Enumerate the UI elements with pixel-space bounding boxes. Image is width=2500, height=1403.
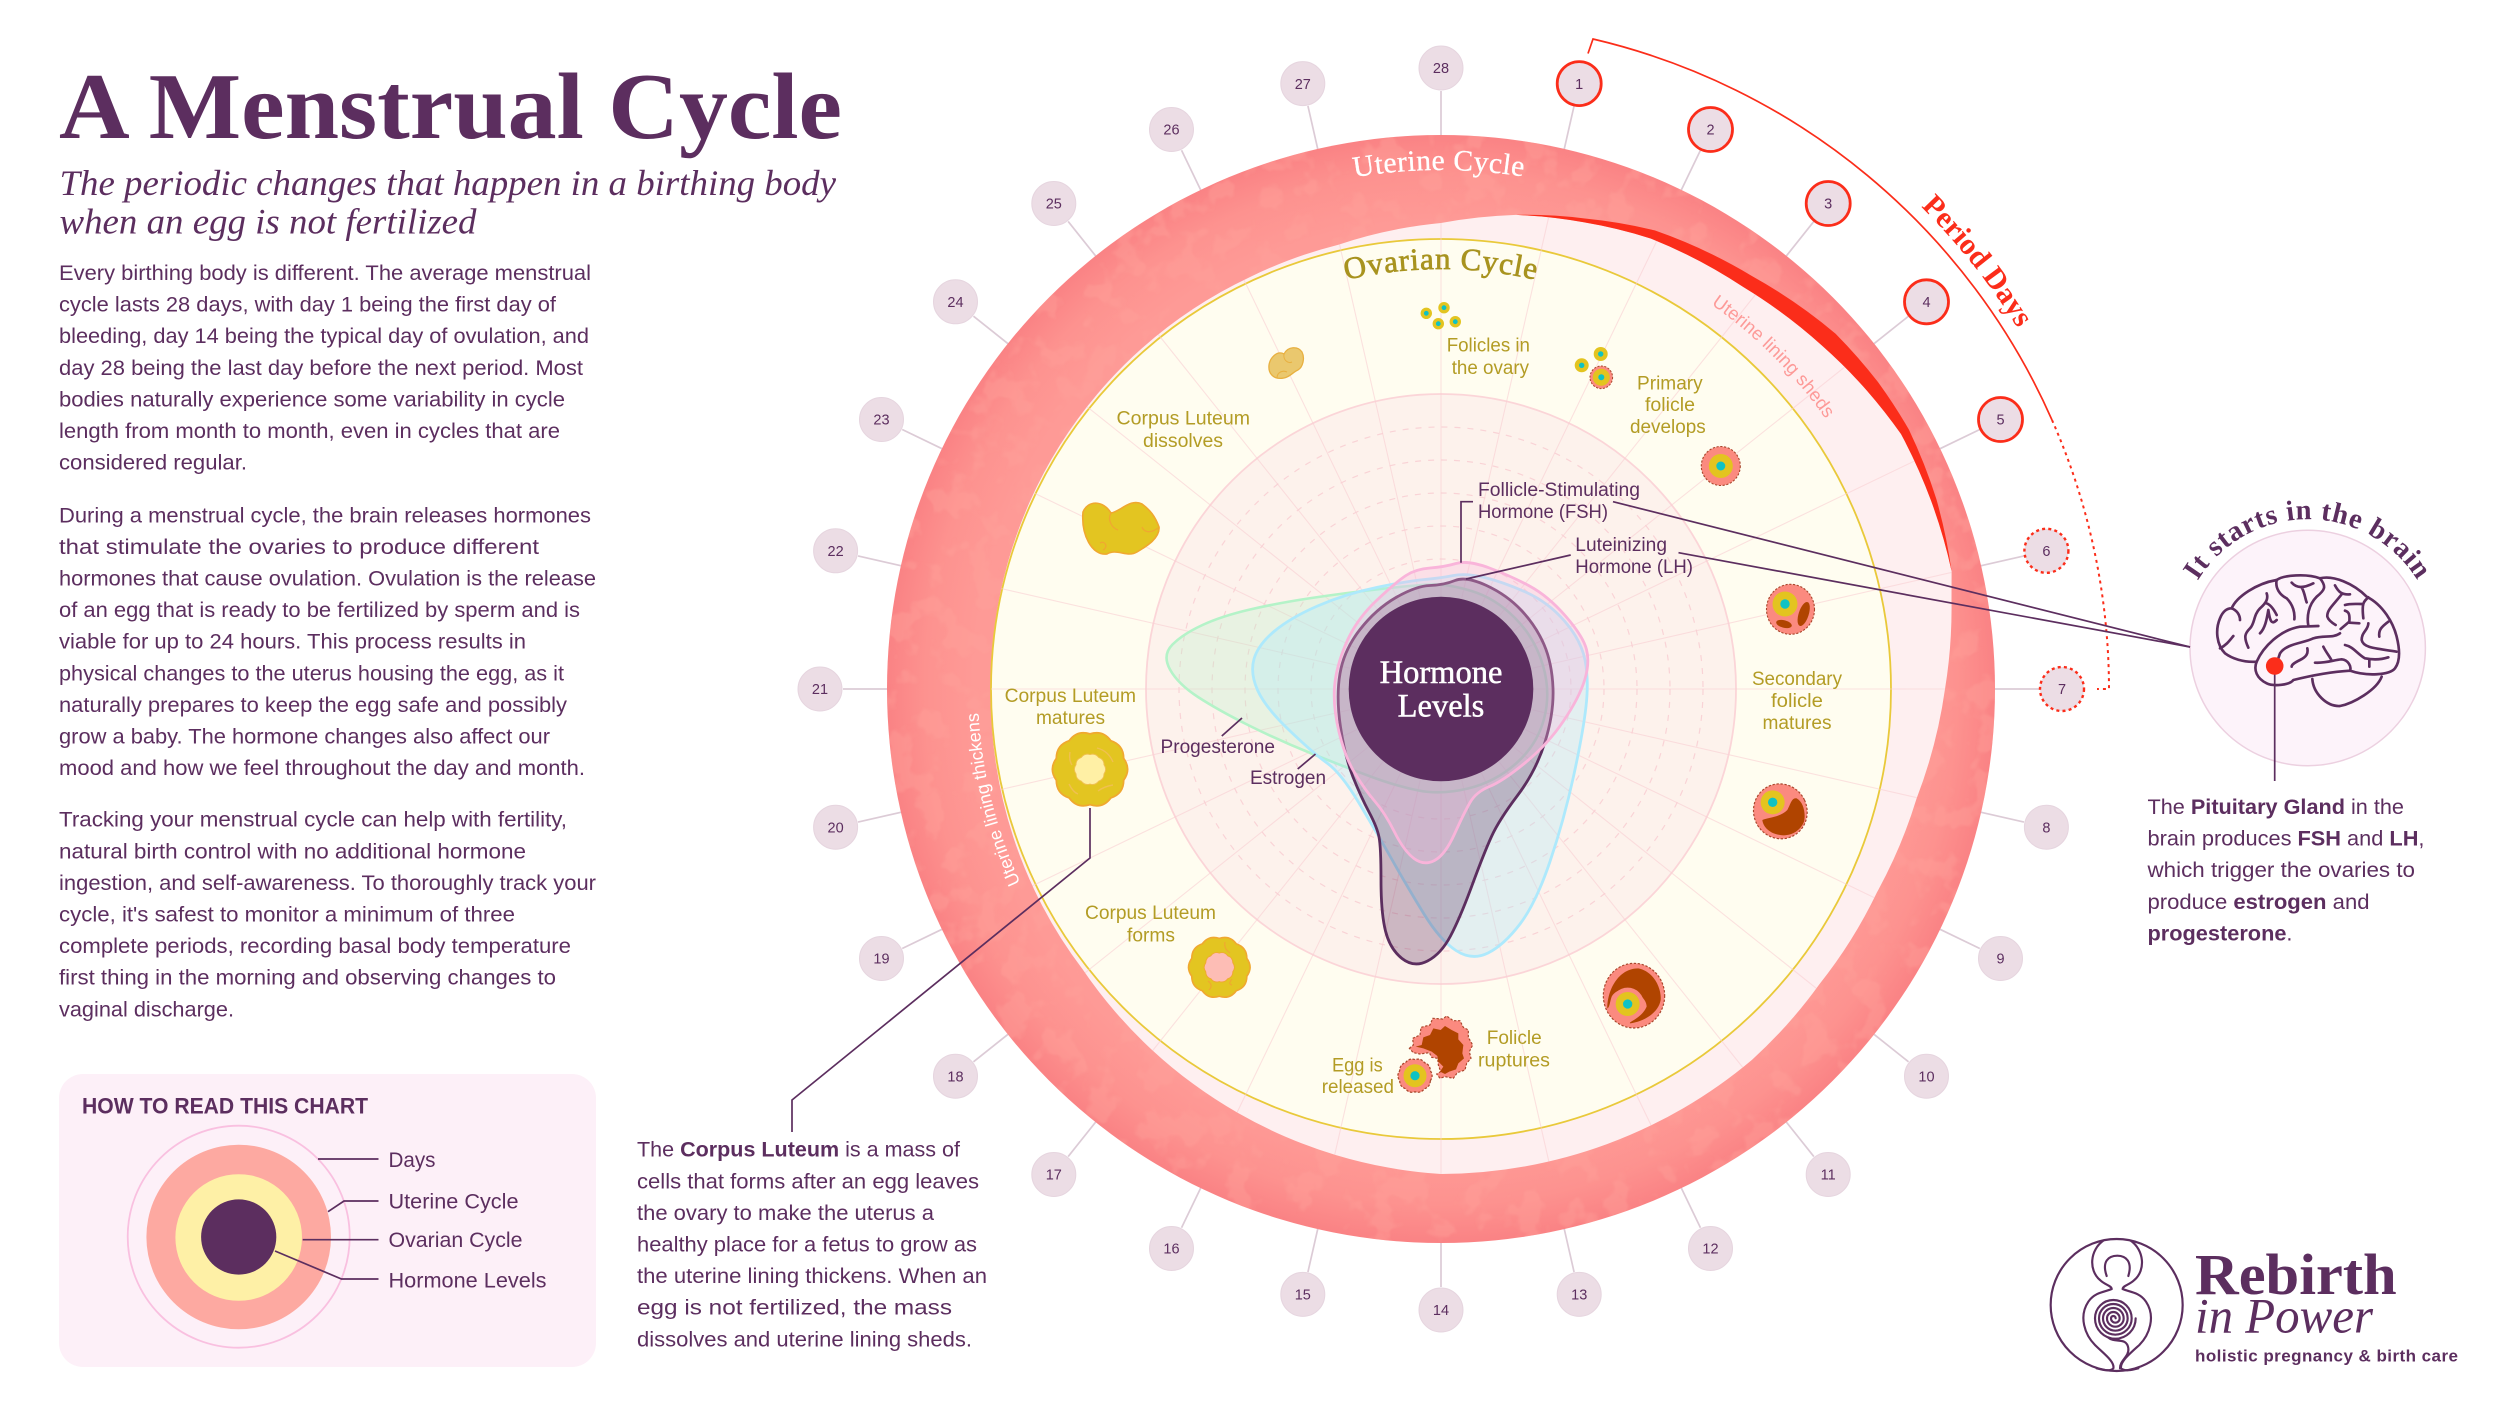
hormone levels centre: [1349, 597, 1533, 781]
day 6: 6: [2042, 544, 2050, 560]
day 10: 10: [1918, 1069, 1935, 1085]
text: egg is released: [1322, 1056, 1394, 1098]
day 16: [1150, 1226, 1194, 1270]
icon: corpus luteum forms: [1189, 937, 1250, 997]
subtitle: The periodic changes that happen in a birthing body: [60, 163, 836, 203]
intro text block: natural birth control with no additional hormone: [59, 840, 526, 863]
period days bracket: [1588, 39, 2109, 689]
panel: how to read this chart: [59, 1074, 596, 1367]
icon: corpus luteum small remnant: [1269, 348, 1303, 378]
title: A Menstrual Cycle: [59, 55, 842, 159]
icon: maturing follicle with fluid: [1744, 775, 1816, 848]
label: LH: Hormone (LH): [1575, 557, 1693, 578]
text: pituitary gland: The Pituitary Gland in the: [2148, 796, 2404, 819]
day 3: 3: [1824, 197, 1832, 213]
day 26: [1150, 108, 1194, 152]
day 28: 28: [1433, 61, 1449, 77]
text: egg is released: Egg is: [1332, 1056, 1383, 1077]
hormone levels disc: [1146, 394, 1736, 984]
icon: corpus luteum matures: [1052, 733, 1128, 806]
legend leaders: [275, 1159, 378, 1279]
text: follicle ruptures: Folicle: [1487, 1028, 1542, 1049]
curved heading: It starts in the brain: [2182, 500, 2426, 580]
heading: ovarian cycle: Ovarian Cycle: [1344, 249, 1536, 280]
intro text block: grow a baby. The hormone changes also affect our: [59, 726, 550, 748]
legend labels: Uterine Cycle: [388, 1190, 518, 1214]
intro text block: first thing in the morning and observing changes to: [59, 967, 556, 990]
day 9: 9: [1996, 952, 2005, 968]
day 17: 17: [1046, 1168, 1062, 1184]
day 25: 25: [1046, 197, 1062, 213]
text: corpus luteum matures: [1005, 686, 1136, 729]
intro text block: physical changes to the uterus housing the egg, as it: [59, 662, 564, 685]
intro text block: bleeding, day 14 being the typical day of ovulation, and: [59, 325, 589, 348]
logo wordmark: in Power: [2195, 1288, 2374, 1344]
logo wordmark: [2195, 1242, 2458, 1366]
day 22: [814, 529, 858, 573]
day 10: [1904, 1054, 1948, 1098]
inner day spokes: [991, 217, 1952, 1174]
intro text block: ingestion, and self-awareness. To thoroughly track your: [59, 872, 596, 895]
day 16: 16: [1163, 1242, 1180, 1258]
text: corpus luteum forms: [1085, 903, 1216, 947]
text: corpus luteum forms: forms: [1127, 926, 1175, 947]
chart: luteinizing hormone curve: [1338, 579, 1553, 964]
text: pituitary gland: progesterone.: [2148, 922, 2292, 945]
heading: uterine cycle: Uterine Cycle: [1352, 150, 1524, 178]
subtitle: [60, 163, 836, 242]
text: corpus luteum matures: matures: [1036, 708, 1105, 729]
intro text block: cycle, it's safest to monitor a minimum of three: [59, 904, 515, 926]
text: egg is released: released: [1322, 1077, 1394, 1098]
icon: antral follicle: [1603, 963, 1665, 1028]
day 19: 19: [873, 952, 890, 968]
label: LH: [1466, 535, 1693, 579]
day 11: 11: [1821, 1168, 1836, 1184]
intro text block: cycle lasts 28 days, with day 1 being the first day of: [59, 294, 556, 317]
day 3: [1806, 182, 1850, 226]
chart: follicle-stimulating hormone curve: [1334, 562, 1588, 863]
legend labels: Days: [388, 1149, 436, 1172]
text: follicles in the ovary: [1447, 336, 1530, 379]
day 19: [860, 936, 904, 980]
day 21: 21: [812, 682, 828, 698]
day 24: 24: [947, 295, 964, 311]
intro text block: that stimulate the ovaries to produce different: [59, 536, 539, 559]
text: corpus luteum callout: The Corpus Luteum is a mass of: [637, 1139, 960, 1162]
text: secondary follicle matures: Secondary: [1752, 669, 1842, 690]
day 24: [934, 280, 978, 324]
text: corpus luteum callout: dissolves and uterine lining sheds.: [637, 1328, 972, 1351]
text: corpus luteum matures: Corpus Luteum: [1005, 686, 1136, 707]
label: estrogen: [1250, 754, 1326, 789]
shedding lining red wedge: [1516, 215, 1952, 571]
intro text block: of an egg that is ready to be fertilized by sperm and is: [59, 599, 580, 622]
text: corpus luteum callout: [637, 1139, 987, 1351]
intro text block: viable for up to 24 hours. This process results in: [59, 631, 526, 654]
hormone levels centre: Hormone: [1380, 655, 1502, 691]
text: corpus luteum callout: cells that forms after an egg leaves: [637, 1170, 979, 1193]
label: uterine lining thickens: Uterine lining thickens: [968, 714, 1019, 887]
intro text block: [59, 262, 596, 1021]
intro text block: Tracking your menstrual cycle can help with fertility,: [59, 809, 567, 832]
day 15: [1281, 1272, 1325, 1316]
day 27: [1281, 62, 1325, 106]
day 5: [1978, 398, 2022, 442]
day 1: [1557, 62, 1601, 106]
intro text block: day 28 being the last day before the next period. Most: [59, 357, 583, 380]
text: primary follicle develops: Primary: [1637, 373, 1703, 394]
day 14: [1419, 1288, 1463, 1332]
intro text block: naturally prepares to keep the egg safe and possibly: [59, 694, 568, 717]
icon: primary follicle: [1575, 347, 1613, 389]
outer day spokes: [843, 91, 2039, 1287]
label: LH: Luteinizing: [1575, 535, 1667, 556]
text: corpus luteum dissolves: [1116, 409, 1250, 452]
text: pituitary gland: brain produces FSH and LH,: [2148, 828, 2424, 851]
day 28: [1419, 46, 1463, 90]
day 4: 4: [1922, 295, 1931, 311]
icon: secondary follicle: [1766, 584, 1814, 634]
day 21: [798, 667, 842, 711]
legend labels: [388, 1149, 546, 1292]
day 26: 26: [1163, 123, 1180, 139]
text: corpus luteum dissolves: dissolves: [1143, 431, 1223, 452]
icon: corpus luteum large remnant: [1083, 503, 1159, 554]
day 8: 8: [2042, 820, 2050, 836]
icon: follicles in the ovary: [1421, 302, 1461, 329]
day 15: 15: [1295, 1288, 1311, 1304]
day 8: [2024, 805, 2068, 849]
day 4: [1904, 280, 1948, 324]
day 20: 20: [828, 820, 844, 836]
label: FSH: Follicle-Stimulating: [1478, 480, 1640, 501]
logo: rebirth in power: [2051, 1239, 2458, 1371]
day 27: 27: [1295, 77, 1311, 93]
text: corpus luteum callout: the ovary to make the uterus a: [637, 1202, 934, 1225]
text: corpus luteum callout: the uterine lining thickens. When an: [637, 1265, 987, 1288]
day 23: [860, 398, 904, 442]
icon: follicle ruptures: [1409, 1016, 1473, 1078]
leader: corpus luteum callout: [792, 808, 1090, 1132]
day 23: 23: [873, 413, 890, 429]
intro text block: length from month to month, even in cycles that are: [59, 420, 560, 443]
label: FSH: [1461, 480, 1640, 563]
text: corpus luteum callout: healthy place for a fetus to grow as: [637, 1234, 977, 1256]
day 7: [2040, 667, 2084, 711]
day 1: 1: [1575, 77, 1583, 93]
day 2: [1688, 108, 1732, 152]
ovarian cycle disc: [991, 239, 1891, 1139]
icon: pituitary marker: [2266, 657, 2284, 781]
text: corpus luteum dissolves: Corpus Luteum: [1116, 409, 1250, 430]
text: follicle ruptures: ruptures: [1478, 1051, 1550, 1072]
day 22: 22: [828, 544, 844, 560]
day 13: [1557, 1272, 1601, 1316]
text: corpus luteum callout: egg is not fertilized, the mass: [637, 1297, 952, 1320]
intro text block: hormones that cause ovulation. Ovulation is the release: [59, 568, 596, 590]
text: corpus luteum forms: Corpus Luteum: [1085, 903, 1216, 924]
icon: brain: [2217, 575, 2399, 706]
intro text block: bodies naturally experience some variability in cycle: [59, 388, 565, 411]
day 7: 7: [2058, 682, 2066, 698]
label: estrogen: Estrogen: [1250, 768, 1326, 789]
day 2: 2: [1706, 123, 1715, 139]
label: period days: Period Days: [1922, 193, 2028, 326]
icon: egg released: [1398, 1059, 1432, 1092]
panel: it starts in the brain: [2182, 500, 2426, 781]
intro text block: Every birthing body is different. The average menstrual: [59, 262, 591, 285]
subtitle: when an egg is not fertilized: [60, 202, 478, 242]
day 14: 14: [1433, 1303, 1449, 1319]
day 17: [1032, 1152, 1076, 1196]
panel heading: HOW TO READ THIS CHART: [82, 1094, 369, 1118]
text: secondary follicle matures: folicle: [1771, 691, 1823, 712]
legend labels: Hormone Levels: [388, 1270, 546, 1292]
intro text block: complete periods, recording basal body temperature: [59, 935, 571, 958]
label: progesterone: [1160, 718, 1275, 758]
legend rings: [128, 1126, 350, 1348]
text: pituitary gland: which trigger the ovaries to: [2146, 859, 2415, 882]
text: primary follicle develops: [1630, 373, 1706, 438]
legend labels: Ovarian Cycle: [388, 1229, 522, 1252]
day 12: 12: [1702, 1242, 1719, 1258]
day 25: [1032, 182, 1076, 226]
text: pituitary gland: [2146, 796, 2424, 945]
text: follicle ruptures: [1478, 1028, 1550, 1072]
day markers: [798, 46, 2084, 1332]
chart: progesterone curve: [1167, 584, 1547, 792]
day 13: 13: [1571, 1288, 1587, 1304]
logo wordmark: Rebirth: [2195, 1242, 2397, 1307]
day 9: [1978, 936, 2022, 980]
uterine lining region: [991, 215, 1952, 1174]
hormone labels and leaders: [1160, 480, 1693, 789]
day 5: 5: [1996, 413, 2005, 429]
intro text block: mood and how we feel throughout the day and month.: [59, 757, 585, 780]
day 18: 18: [947, 1069, 964, 1085]
text: secondary follicle matures: matures: [1762, 713, 1832, 734]
hormone levels centre: Levels: [1398, 688, 1484, 724]
leaders from brain to FSH and LH: [1613, 502, 2190, 647]
text: primary follicle develops: develops: [1630, 417, 1706, 438]
icon: growing follicle: [1701, 446, 1740, 486]
chart: estrogen curve: [1253, 575, 1587, 956]
day 20: [814, 805, 858, 849]
day 6: [2024, 529, 2068, 573]
day 12: [1688, 1226, 1732, 1270]
text: follicles in the ovary: the ovary: [1452, 358, 1529, 379]
uterine cycle ring: [880, 130, 2000, 1250]
day 18: [934, 1054, 978, 1098]
text: primary follicle develops: folicle: [1645, 395, 1695, 416]
label: progesterone: Progesterone: [1160, 737, 1275, 758]
day 11: [1806, 1152, 1850, 1196]
intro text block: vaginal discharge.: [59, 998, 234, 1021]
label: uterine lining sheds: Uterine lining sheds: [1714, 294, 1832, 418]
logo wordmark: holistic pregnancy & birth care: [2195, 1347, 2458, 1366]
intro text block: considered regular.: [59, 452, 247, 475]
text: follicles in the ovary: Folicles in: [1447, 336, 1530, 357]
text: secondary follicle matures: [1752, 669, 1842, 734]
label: FSH: Hormone (FSH): [1478, 502, 1608, 523]
text: pituitary gland: produce estrogen and: [2148, 891, 2370, 914]
logo mark: [2051, 1239, 2183, 1371]
intro text block: During a menstrual cycle, the brain releases hormones: [59, 504, 591, 527]
